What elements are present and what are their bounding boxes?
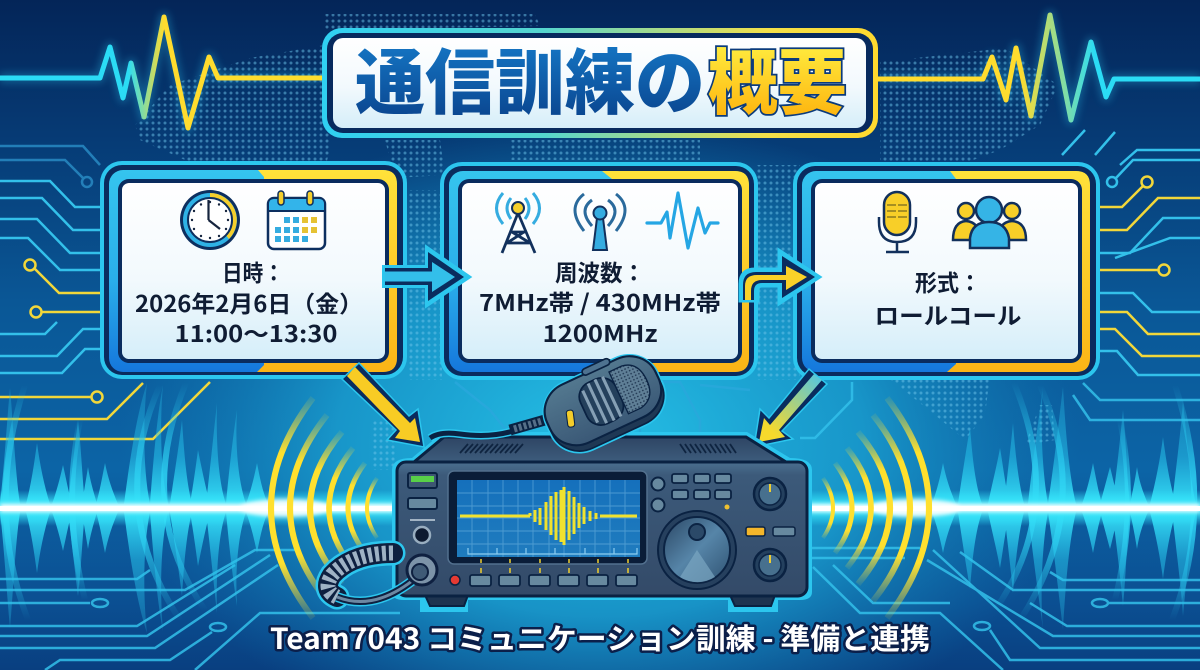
main dial — [658, 511, 736, 589]
panel: frequency — [440, 162, 758, 380]
yellow radio waves right — [823, 398, 929, 618]
icon: people — [953, 197, 1026, 248]
text: format: 形式： — [915, 264, 981, 298]
radio lid — [414, 437, 786, 462]
coiled cord — [328, 553, 437, 602]
text: frequency: 1200MHz — [542, 315, 658, 349]
small round knobs — [652, 478, 664, 512]
icon: calendar — [268, 191, 325, 249]
sound waves left — [0, 383, 268, 633]
text: date and time: 日時： — [222, 254, 284, 288]
mic outer halo — [532, 343, 677, 464]
text: date and time — [135, 254, 363, 349]
radio transceiver — [328, 341, 812, 612]
icon: radio antenna — [575, 194, 625, 250]
arrow: panel 1 to panel 2 — [385, 250, 467, 303]
title text: 通信訓練の — [355, 27, 705, 129]
sound waves right — [932, 383, 1196, 629]
heartbeat line left — [0, 17, 322, 128]
title text: 概要 — [708, 27, 847, 129]
world map dots — [135, 14, 1058, 470]
arrow: panel 2 to panel 3 — [741, 252, 818, 302]
lid vents — [460, 444, 736, 453]
icon: microphone — [879, 192, 916, 252]
radio body — [397, 462, 807, 596]
red button — [450, 575, 460, 585]
mic top shell — [535, 346, 671, 455]
radio outline glow — [392, 432, 812, 612]
mic mesh — [609, 359, 656, 414]
panel: date and time — [100, 161, 407, 379]
jack — [410, 520, 435, 543]
footer caption: Team7043 コミュニケーション訓練 - 準備と連携 — [270, 616, 930, 658]
yellow radio waves left — [271, 398, 377, 618]
small yellow ticks — [481, 559, 628, 573]
icon: lattice tower — [496, 193, 540, 253]
upper right knob — [754, 478, 786, 510]
arrow: panel 1 to radio — [342, 363, 424, 447]
title box — [322, 27, 878, 138]
text: frequency — [479, 254, 721, 349]
text: frequency: 7MHz帯 / 430MHz帯 — [479, 284, 721, 318]
arrow: panel 3 to radio — [754, 369, 827, 447]
display screen — [457, 480, 640, 557]
circuit lines left — [0, 146, 400, 670]
hand microphone — [531, 341, 677, 464]
circuit lines right — [455, 130, 1200, 670]
display bezel — [448, 471, 647, 564]
mic hook — [581, 358, 611, 376]
grey button — [408, 498, 437, 509]
microphone cable — [430, 420, 545, 438]
icon: signal pulse — [647, 193, 718, 248]
text: format: ロールコール — [874, 297, 1022, 331]
orange and grey buttons — [746, 527, 795, 536]
button grid — [672, 474, 731, 499]
text: date and time: 2026年2月6日（金） — [135, 285, 363, 319]
mic grille stripes — [574, 373, 628, 430]
mic lower shell — [536, 349, 673, 461]
text: format — [874, 264, 1022, 331]
text: frequency: 周波数： — [555, 254, 645, 288]
soft keys — [470, 575, 637, 586]
panel: format — [793, 162, 1100, 380]
green status button — [408, 473, 437, 488]
mic PTT button — [566, 410, 575, 428]
text: date and time: 11:00～13:30 — [174, 315, 338, 349]
radio feet — [425, 595, 775, 606]
heartbeat line right — [878, 15, 1200, 120]
icon: clock — [180, 190, 240, 250]
yellow indicator — [724, 504, 730, 510]
lower right knob — [754, 549, 786, 581]
glowing centre line — [0, 490, 1200, 526]
